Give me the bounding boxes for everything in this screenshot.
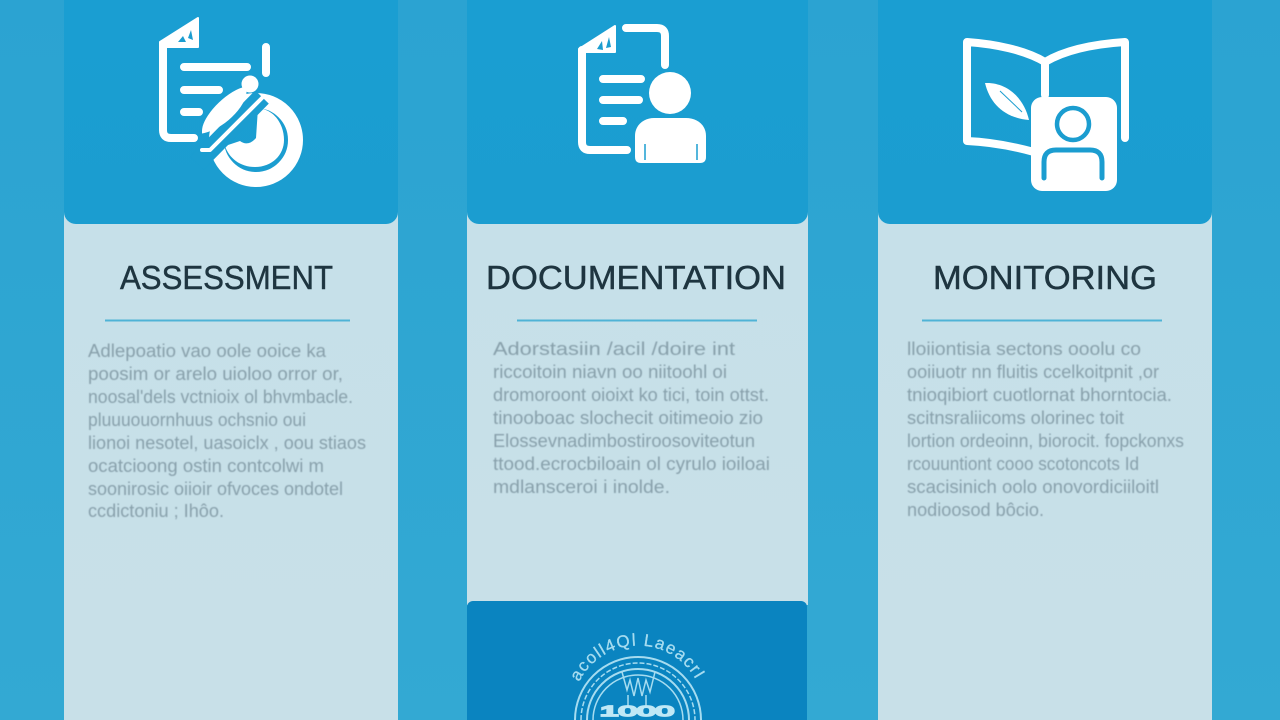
text block: documentation body: tinooboac slochecit oitimeoio zio	[493, 408, 763, 428]
text block: assessment body: lionoi nesotel, uasoiclx , oou stiaos	[88, 433, 366, 453]
text block: assessment body: pluuuouornhuus ochsnio oui	[88, 410, 306, 430]
heading: assessment: ASSESSMENT	[120, 259, 333, 296]
panel: assessment	[64, 0, 398, 720]
text block: assessment body: ocatcioong ostin contcolwi m	[88, 456, 324, 476]
text block: documentation body: Adorstasiin /acil /doire int	[493, 339, 735, 359]
monitoring header band	[878, 0, 1212, 224]
icon: open book with leaf and portrait	[967, 42, 1125, 191]
panel: documentation	[467, 0, 808, 605]
panel: monitoring	[878, 0, 1212, 720]
icon: document with person	[579, 26, 706, 163]
text block: assessment body: Adlepoatio vao oole ooice ka	[88, 341, 327, 361]
text block: monitoring body: rcouuntiont cooo scotoncots Id	[907, 454, 1139, 474]
text block: monitoring body: ooiiuotr nn fluitis ccelkoitpnit ,or	[907, 362, 1159, 382]
text block: documentation body: riccoitoin niavn oo niitoohl oi	[493, 362, 727, 382]
heading: monitoring: MONITORING	[933, 259, 1157, 296]
panel: seal card	[467, 601, 807, 720]
text block: monitoring body: tnioqibiort cuotlornat bhorntocia.	[907, 385, 1172, 405]
text block: monitoring body: nodioosod bôcio.	[907, 500, 1044, 520]
text block: monitoring body: scitnsraliicoms olorinec toit	[907, 408, 1124, 428]
text block: monitoring body: scacisinich oolo onovordiciiloitl	[907, 477, 1159, 497]
text block: documentation body: ttood.ecrocbiloain ol cyrulo ioiloai	[493, 454, 770, 474]
text block: assessment body: soonirosic oiioir ofvoces ondotel	[88, 479, 343, 499]
text block: assessment body: poosim or arelo uioloo orror or,	[88, 364, 343, 384]
seal numerals: 1000	[600, 703, 674, 720]
icon: circular seal	[572, 633, 705, 720]
documentation header band	[467, 0, 808, 224]
text block: monitoring body	[907, 339, 1184, 520]
icon: document with pen and clock	[160, 18, 296, 180]
text block: assessment body: ccdictoniu ; Ihôo.	[88, 501, 224, 521]
text block: monitoring body: lloiiontisia sectons ooolu co	[907, 339, 1141, 359]
heading: documentation: DOCUMENTATION	[486, 259, 786, 296]
text block: documentation body	[493, 339, 770, 497]
assessment header band	[64, 0, 398, 224]
text block: monitoring body: lortion ordeoinn, biorocit. fopckonxs	[907, 431, 1184, 451]
text block: assessment body	[88, 341, 366, 521]
text block: documentation body: Elossevnadimbostiroosoviteotun	[493, 431, 755, 451]
text block: documentation body: dromoroont oioixt ko tici, toin ottst.	[493, 385, 769, 405]
text block: assessment body: noosal'dels vctnioix ol bhvmbacle.	[88, 387, 353, 407]
seal lettering: acoll4Ql LaeacrIl	[572, 633, 705, 681]
text block: documentation body: mdlansceroi i inolde.	[493, 477, 670, 497]
